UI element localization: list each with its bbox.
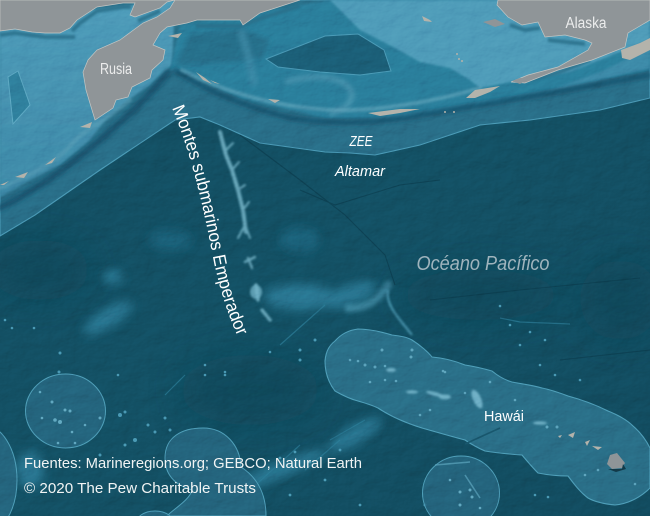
EEZ band: Russia and Aleutians bbox=[0, 0, 650, 236]
seamount and plateau relief bbox=[4, 132, 650, 506]
Kuril-Kamchatka and Aleutian trenches bbox=[0, 70, 650, 208]
basin light ridge bbox=[240, 30, 255, 85]
high seas enclave in the Sea of Okhotsk bbox=[8, 71, 30, 124]
label: ZEE: ZEE bbox=[349, 133, 373, 150]
land: Alaska bbox=[497, 0, 650, 83]
label: Hawái: Hawái bbox=[484, 408, 524, 425]
dark ocean shading bbox=[0, 240, 650, 425]
scattered seamounts bbox=[4, 305, 581, 506]
other island EEZ circles bbox=[0, 374, 500, 516]
label: Montes submarinos Emperador: Montes submarinos Emperador bbox=[172, 104, 246, 334]
Hawaiian main islands bbox=[607, 453, 625, 469]
Bering Sea and Okhotsk shallow waters bbox=[0, 0, 650, 197]
label: Océano Pacífico: Océano Pacífico bbox=[416, 253, 550, 275]
Hawaii EEZ bbox=[325, 329, 650, 505]
Bering basin bbox=[170, 0, 650, 118]
source and copyright bbox=[24, 455, 362, 497]
source line: Fuentes: Marineregions.org; GEBCO; Natural Earth bbox=[24, 455, 362, 472]
Bering shelf bbox=[330, 0, 650, 88]
coastal dark fringe bbox=[0, 6, 590, 80]
Northwestern Hawaiian ridge bbox=[349, 348, 636, 485]
label: Alaska: Alaska bbox=[566, 15, 607, 32]
copyright line: © 2020 The Pew Charitable Trusts bbox=[24, 480, 256, 497]
label: Altamar: Altamar bbox=[334, 164, 386, 180]
land: Russia bbox=[0, 0, 300, 120]
basin shading near Kamchatka bbox=[175, 28, 270, 65]
Sea of Okhotsk and Kuril side bbox=[0, 0, 175, 197]
label: Rusia: Rusia bbox=[100, 61, 132, 78]
Gulf of Alaska shelf bbox=[545, 48, 650, 92]
high seas enclave in the Bering Sea bbox=[266, 34, 391, 75]
island arc ridges bbox=[0, 70, 480, 188]
Emperor seamount chain bbox=[220, 132, 270, 320]
seamounts inside circles bbox=[39, 391, 481, 509]
